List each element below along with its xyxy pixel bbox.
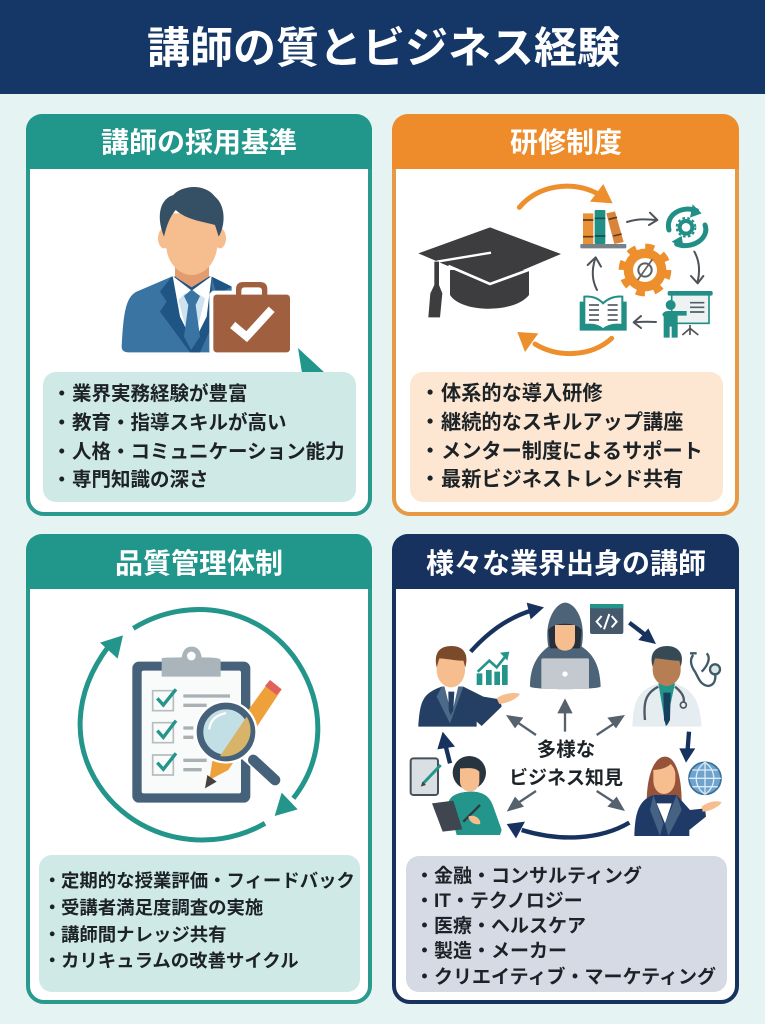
list: hiring criteria: 教育・指導スキルが高い — [72, 411, 287, 434]
icon: instructor with briefcase — [122, 187, 294, 356]
person: finance — [418, 646, 520, 727]
list: quality management: ・ — [43, 924, 61, 945]
list: quality management: 講師間ナレッジ共有 — [61, 924, 227, 945]
list: training system: 最新ビジネストレンド共有 — [441, 468, 683, 491]
heading: quality management: 品質管理体制 — [115, 548, 283, 579]
diagram: five professionals in a cycle — [411, 603, 722, 838]
list: quality management: 定期的な授業評価・フィードバック — [61, 870, 355, 891]
list: industries: ・ — [415, 916, 434, 937]
list: training system — [410, 372, 723, 502]
list: industries: 医療・ヘルスケア — [434, 915, 586, 937]
panel: training system — [392, 114, 739, 514]
person: creative — [411, 756, 502, 835]
center label second line: ビジネス知見 — [509, 767, 623, 789]
list: quality management: ・ — [43, 950, 61, 971]
list: hiring criteria: ・ — [52, 383, 72, 405]
list: training system: ・ — [420, 469, 440, 491]
center label: 多様な — [537, 739, 595, 761]
list: industries — [406, 856, 727, 992]
heading: training system: 研修制度 — [510, 127, 622, 158]
list: hiring criteria: ・ — [52, 412, 72, 434]
list: industries: ・ — [415, 967, 434, 988]
list: industries: IT・テクノロジー — [434, 890, 583, 912]
heading: hiring criteria: 講師の採用基準 — [101, 127, 297, 158]
person: IT engineer — [530, 603, 623, 689]
icon: graduation cap and training cycle — [418, 184, 713, 354]
person: doctor — [632, 646, 720, 727]
list: hiring criteria: 人格・コミュニケーション能力 — [72, 441, 345, 463]
list: industries: クリエイティブ・マーケティング — [434, 965, 716, 988]
list: training system: 継続的なスキルアップ講座 — [441, 411, 683, 434]
list: industries: 金融・コンサルティング — [434, 864, 642, 887]
list: industries: ・ — [415, 941, 434, 962]
list: training system: ・ — [420, 441, 440, 463]
person: marketing — [634, 757, 722, 836]
panel: diverse industry backgrounds — [392, 534, 739, 1002]
list: hiring criteria — [43, 372, 356, 502]
list: quality management: 受講者満足度調査の実施 — [61, 897, 263, 918]
list: hiring criteria: 専門知識の深さ — [72, 468, 209, 491]
icon: teal pointer — [298, 348, 325, 373]
list: quality management — [39, 855, 360, 992]
list: hiring criteria: 業界実務経験が豊富 — [72, 382, 248, 405]
list: quality management: ・ — [43, 870, 61, 891]
list: training system: ・ — [420, 383, 440, 405]
panel: hiring criteria — [26, 114, 372, 514]
list: industries: 製造・メーカー — [434, 940, 567, 962]
list: training system: 体系的な導入研修 — [441, 381, 603, 405]
list: quality management: カリキュラムの改善サイクル — [61, 950, 299, 971]
icon: clipboard, magnifier and cycle — [80, 610, 318, 840]
title banner — [0, 0, 765, 94]
heading: diverse industry backgrounds: 様々な業界出身の講師 — [426, 548, 706, 579]
list: training system: ・ — [420, 412, 440, 434]
list: industries: ・ — [415, 866, 434, 887]
list: industries: ・ — [415, 891, 434, 912]
list: quality management: ・ — [43, 897, 61, 918]
list: training system: メンター制度によるサポート — [441, 440, 703, 463]
cycle arrows — [437, 603, 695, 838]
center arrows — [506, 698, 625, 812]
list: hiring criteria: ・ — [52, 469, 72, 491]
panel: quality management — [26, 534, 372, 1002]
title banner: 講師の質とビジネス経験 — [147, 25, 620, 73]
list: hiring criteria: ・ — [52, 441, 72, 463]
